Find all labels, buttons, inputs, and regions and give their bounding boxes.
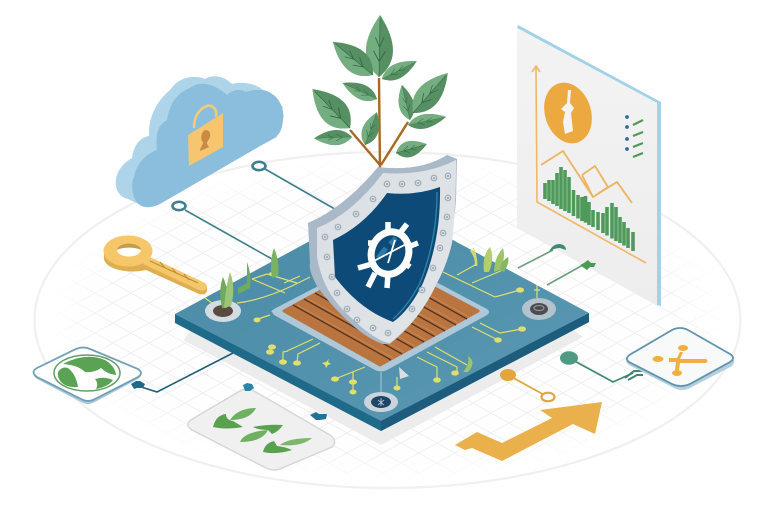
key — [104, 236, 207, 294]
connector ring lines — [172, 162, 340, 259]
orange info circle — [537, 76, 599, 150]
mounting hole right — [522, 298, 556, 320]
globe card — [34, 348, 145, 404]
shield silver face — [317, 160, 456, 343]
leaf card — [188, 383, 335, 470]
grass sprouts — [220, 247, 508, 308]
green connector — [560, 351, 643, 382]
plant stem and branches — [350, 78, 408, 170]
gear emblem — [358, 222, 418, 288]
chip socket — [271, 255, 489, 372]
shield blue face — [333, 187, 440, 322]
connector plug — [131, 381, 145, 389]
board shadow — [183, 320, 583, 445]
network icon — [652, 345, 708, 376]
shield — [308, 155, 457, 344]
chart panel — [517, 25, 661, 306]
orange connector — [500, 369, 554, 401]
leaf icons — [213, 408, 312, 453]
connector to globe card — [135, 353, 233, 392]
yellow circuit traces — [205, 248, 540, 394]
green connectors to chart — [518, 244, 596, 285]
floor disc with grid — [30, 150, 746, 492]
connector plug right — [310, 412, 327, 420]
network card — [626, 328, 734, 390]
plant — [303, 15, 456, 170]
growth arrow — [455, 402, 602, 461]
rivets — [322, 173, 451, 336]
globe icon — [54, 355, 120, 391]
cloud with padlock — [116, 76, 283, 207]
wood deck — [284, 259, 478, 365]
green bars — [545, 167, 633, 251]
circuit board — [175, 202, 589, 431]
shield side — [308, 155, 457, 344]
orange line chart — [541, 151, 632, 203]
padlock — [188, 106, 223, 166]
plant-sprout mounting hole left — [205, 300, 241, 322]
connector plug top — [243, 383, 254, 391]
chart axes — [532, 66, 646, 263]
mounting hole bottom — [364, 372, 398, 412]
checklist — [625, 115, 643, 157]
leaves — [303, 15, 456, 161]
